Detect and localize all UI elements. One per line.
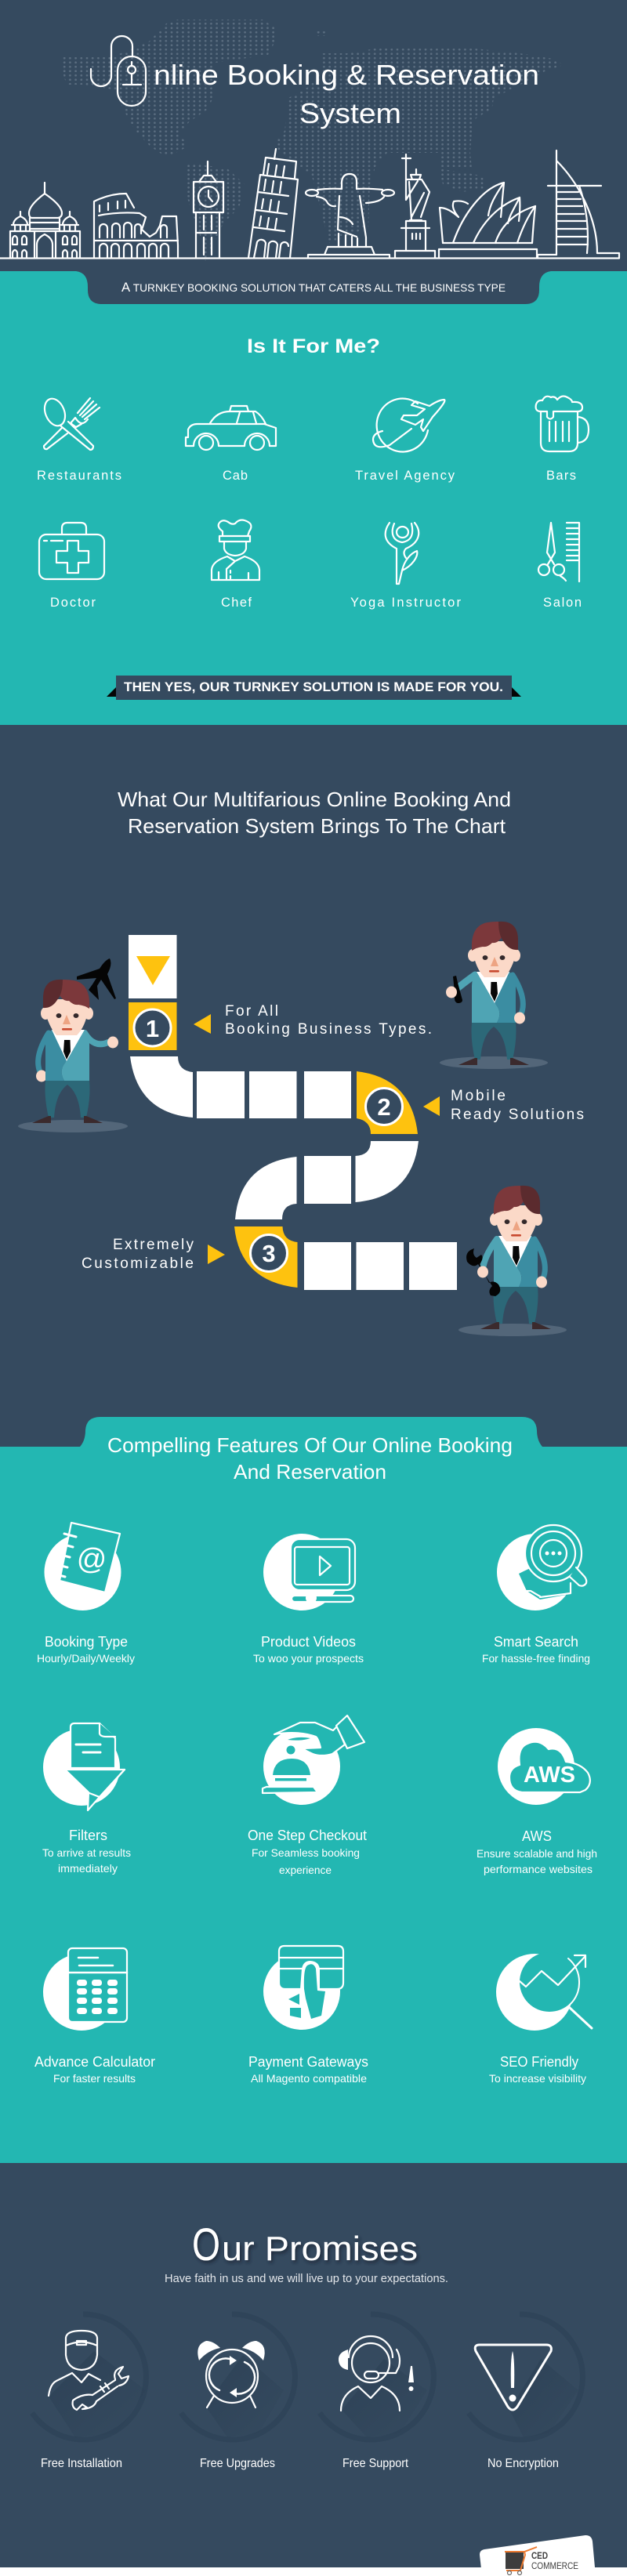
logo: CedCommerce card <box>480 2535 595 2576</box>
sublabel: To increase visibility <box>489 2072 586 2085</box>
label: Cab <box>223 469 248 483</box>
item: salon <box>538 523 582 610</box>
road chart <box>129 935 457 1290</box>
label: No Encryption <box>487 2457 559 2470</box>
label: Restaurants <box>37 469 121 483</box>
exclamation mark <box>408 2366 414 2382</box>
sublabel: experience <box>279 1864 332 1876</box>
panel: our promises <box>0 2163 627 2567</box>
label: Smart Search <box>494 1634 578 1650</box>
callout: step 2: Mobile <box>451 1088 506 1104</box>
label: Travel Agency <box>355 469 455 483</box>
item: restaurants <box>37 396 121 483</box>
progress ring <box>181 2314 295 2440</box>
label: Product Videos <box>261 1634 356 1650</box>
icon: beer mug <box>536 397 589 451</box>
heading: And Reservation <box>234 1460 386 1484</box>
step 3 tile: 3 <box>262 1240 276 1267</box>
feature: filters <box>42 1723 131 1875</box>
title: nline Booking & Reservation <box>154 59 539 91</box>
icon: aws cloud <box>498 1728 590 1805</box>
title: System <box>299 97 401 129</box>
landmark: Colosseum <box>94 194 178 258</box>
step 3 tile <box>234 1226 298 1288</box>
label: Salon <box>543 596 582 610</box>
icon: video player <box>263 1534 355 1610</box>
label: Free Support <box>342 2457 408 2470</box>
feature: product videos <box>253 1534 364 1665</box>
sublabel <box>477 1847 597 1875</box>
landmark: Burj Al Arab <box>538 150 619 258</box>
promise: free upgrades <box>181 2314 295 2470</box>
landmark: Taj Mahal <box>10 183 80 258</box>
label: Payment Gateways <box>248 2054 368 2070</box>
icon: card and finger <box>263 1946 343 2030</box>
character: man with plane <box>18 958 128 1132</box>
label: AWS <box>522 1828 552 1844</box>
heading: Compelling Features Of Our Online Booking <box>107 1433 513 1457</box>
heading: our promises: O <box>192 2219 220 2270</box>
icon: computer mouse as letter O <box>91 36 146 106</box>
progress ring <box>469 2314 582 2440</box>
step 1 tile <box>129 1002 177 1050</box>
item: cab <box>186 406 276 483</box>
sublabel: To woo your prospects <box>253 1652 364 1665</box>
promise: free support <box>320 2314 433 2470</box>
logo mark: cart <box>505 2547 537 2575</box>
label: Yoga Instructor <box>350 596 461 610</box>
label: Free Installation <box>41 2457 122 2470</box>
feature: booking type <box>37 1523 135 1665</box>
icon: yoga figure <box>386 523 419 584</box>
heading: our promises: ur Promises <box>222 2230 418 2268</box>
callout: step 3: Extremely <box>113 1237 194 1253</box>
callout: step 3 <box>82 1237 225 1272</box>
world map dots <box>62 20 564 261</box>
landmark: Big Ben <box>194 161 223 258</box>
long shadow <box>342 2359 427 2437</box>
icon: headset agent <box>339 2336 414 2411</box>
feature: advance calculator <box>34 1948 155 2085</box>
ribbon banner: THEN YES, OUR TURNKEY SOLUTION IS MADE FOR YOU. <box>124 679 503 694</box>
label: Free Upgrades <box>200 2457 275 2470</box>
panel: is it for me <box>0 271 627 725</box>
icon: scissors and comb <box>538 523 579 582</box>
feature: smart search <box>482 1525 590 1665</box>
landmark: Christ the Redeemer <box>306 174 394 258</box>
landmark: Sydney Opera House <box>439 183 537 258</box>
step 2 tile <box>357 1071 418 1134</box>
icon: calculator <box>43 1948 127 2031</box>
road tiles <box>130 1056 457 1290</box>
label: Advance Calculator <box>34 2054 155 2070</box>
sublabel: Hourly/Daily/Weekly <box>37 1652 135 1665</box>
feature: aws <box>477 1728 597 1875</box>
long shadow <box>49 2351 146 2437</box>
progress ring <box>32 2314 146 2440</box>
sublabel <box>252 1846 360 1876</box>
item: doctor <box>39 523 104 610</box>
logo wordmark: COMMERCE <box>531 2560 578 2571</box>
label: SEO Friendly <box>500 2054 578 2070</box>
sublabel: performance websites <box>484 1863 593 1875</box>
icon: plane around globe <box>373 399 444 452</box>
promise: no encryption <box>469 2314 582 2470</box>
sublabel: immediately <box>58 1862 118 1875</box>
long shadow <box>205 2355 284 2437</box>
subheading: Have faith in us and we will live up to your expectations. <box>165 2272 448 2285</box>
sublabel: To arrive at results <box>42 1846 131 1859</box>
step 2 tile: 2 <box>377 1093 391 1121</box>
heading <box>118 788 511 838</box>
sublabel: All Magento compatible <box>251 2072 367 2085</box>
panel: what the system brings <box>0 725 627 1447</box>
icon: spoon and fork <box>41 396 100 450</box>
ribbon banner <box>107 676 521 700</box>
heading: Reservation System Brings To The Chart <box>128 814 506 838</box>
long shadow <box>509 2359 578 2437</box>
callout: step 1: For All <box>225 1003 278 1020</box>
label: Booking Type <box>45 1634 128 1650</box>
logo wordmark <box>531 2550 578 2571</box>
item: chef <box>212 520 259 610</box>
heading: is it for me: Is It For Me? <box>247 335 380 357</box>
icon: warning triangle <box>475 2345 551 2410</box>
label: Filters <box>69 1828 107 1843</box>
sublabel <box>42 1846 131 1875</box>
sublabel: For hassle-free finding <box>482 1652 590 1665</box>
callout: step 3: Customizable <box>82 1255 194 1272</box>
landmark: Leaning Tower of Pisa <box>248 149 298 258</box>
icon: magnifier <box>497 1525 586 1610</box>
heading: our promises <box>192 2219 418 2270</box>
icon: funnel and file <box>43 1723 125 1810</box>
callout: step 2 <box>423 1088 584 1123</box>
callout: step 1 <box>194 1003 432 1038</box>
character: man with phone <box>440 922 548 1069</box>
icon: address book: @ <box>77 1543 107 1576</box>
icon: service bell and hand <box>263 1716 364 1805</box>
heading: What Our Multifarious Online Booking And <box>118 788 511 811</box>
item: travel agency <box>355 399 455 483</box>
feature: seo friendly <box>489 1952 592 2085</box>
sublabel: For Seamless booking <box>252 1846 360 1859</box>
callout: step 2: Ready Solutions <box>451 1107 584 1123</box>
skyline illustration <box>0 149 619 259</box>
callout: step 1: Booking Business Types. <box>225 1021 432 1038</box>
start tile with arrow <box>129 935 177 998</box>
label: One Step Checkout <box>248 1828 367 1843</box>
feature: one step checkout <box>248 1716 367 1876</box>
sublabel: For faster results <box>53 2072 136 2085</box>
icon: medical kit <box>39 523 104 579</box>
ground line <box>0 257 619 259</box>
label: Chef <box>221 596 252 610</box>
icon: taxi <box>186 406 276 450</box>
landmark: Statue of Liberty <box>395 154 435 258</box>
character: man with wrench <box>458 1186 567 1336</box>
feature: payment gateways <box>248 1946 368 2085</box>
title <box>154 59 539 129</box>
label: Bars <box>546 469 576 483</box>
logo wordmark: CED <box>531 2550 548 2561</box>
icon: address book <box>44 1523 121 1610</box>
promise: free installation <box>32 2314 146 2470</box>
icon: aws cloud: AWS <box>524 1763 575 1788</box>
tagline tab: A TURNKEY BOOKING SOLUTION THAT CATERS ALL THE BUSINESS TYPE <box>121 280 506 295</box>
label: Doctor <box>50 596 96 610</box>
sublabel: Ensure scalable and high <box>477 1847 597 1860</box>
item: bars <box>536 397 589 483</box>
icon: worker with wrench <box>49 2331 129 2410</box>
progress ring <box>320 2314 433 2440</box>
tagline tab <box>76 271 551 304</box>
step 1 tile: 1 <box>146 1015 159 1042</box>
panel: compelling features <box>0 1417 627 2163</box>
icon: chef <box>212 520 259 580</box>
icon: alarm clock <box>198 2341 265 2408</box>
icon: seo magnifier chart <box>496 1952 592 2031</box>
heading <box>107 1433 513 1484</box>
panel: header background <box>0 0 627 271</box>
item: yoga instructor <box>350 523 461 610</box>
